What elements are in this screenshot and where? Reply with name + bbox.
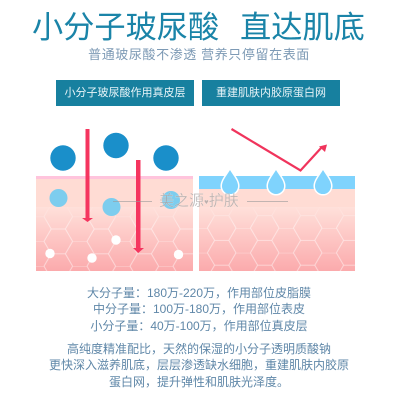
subtitle: 普通玻尿酸不渗透 营养只停留在表面 [88,47,310,62]
small molecules [45,235,183,263]
watermark: 美之源 [159,192,204,210]
large molecules [50,133,179,171]
label: left [56,80,194,106]
description [49,342,349,389]
label: right: 重建肌肤内胶原蛋白网 [216,87,326,99]
arrow: short down [133,160,144,253]
title [32,10,365,45]
water drops [221,168,332,195]
molecular weight list: 中分子量：100万-180万，作用部位表皮 [93,302,305,316]
title: 直达肌底 [240,10,365,45]
panel: left skin [36,176,193,271]
molecular weight list: 小分子量：40万-100万，作用部位真皮层 [90,319,308,333]
watermark: ♥ [204,198,209,206]
arrow: long down [82,129,93,222]
description: 更快深入滋养肌底，层层渗透缺水细胞，重建肌肤内胶原 [49,358,349,372]
molecular weight list: 大分子量：180万-220万，作用部位皮脂膜 [87,286,311,300]
panel: right skin [199,176,355,271]
skin diagrams [36,128,355,271]
description: 高纯度精准配比，天然的保湿的小分子透明质酸钠 [67,342,331,356]
watermark [113,192,288,210]
title: 小分子玻尿酸 [32,10,219,45]
description: 蛋白网，提升弹性和肌肤光泽度。 [109,375,289,389]
label: right [202,80,340,106]
molecular weight list [87,286,311,333]
watermark: 护肤 [209,192,239,210]
medium molecules [50,189,180,216]
label: left: 小分子玻尿酸作用真皮层 [64,87,186,99]
arrow: bounce [232,129,327,170]
